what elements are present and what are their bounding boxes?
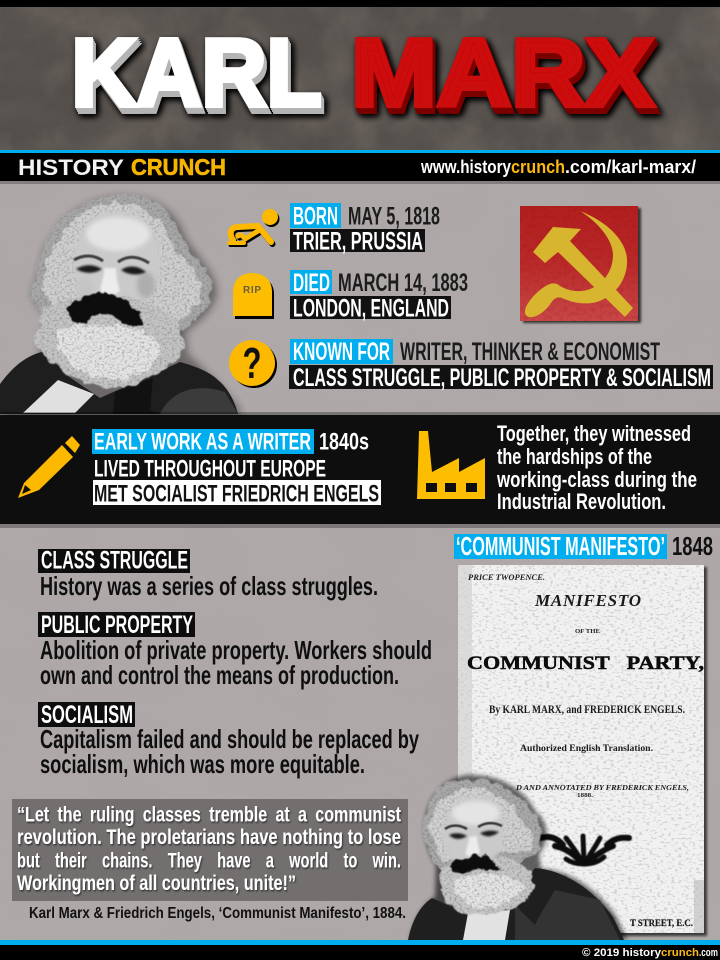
factory text: Industrial Revolution. <box>497 489 666 514</box>
manifesto title page: PRICE TWOPENCE. <box>468 573 545 582</box>
icon: question mark <box>229 339 277 388</box>
born row: MAY 5, 1818 <box>348 202 440 230</box>
header banner with stone texture <box>0 0 720 151</box>
brand bar: CRUNCH <box>131 154 226 180</box>
socialism block: SOCIALISM <box>41 701 133 729</box>
socialism block <box>38 701 419 779</box>
footer bar <box>0 940 720 960</box>
quote box: Workingmen of all countries, unite!” <box>17 872 296 895</box>
brand bar: .com/karl-marx/ <box>565 157 696 177</box>
factory text: the hardships of the <box>497 444 652 469</box>
factory text <box>496 421 697 514</box>
born row: TRIER, PRUSSIA <box>293 228 423 256</box>
icon: RIP tombstone <box>233 273 274 319</box>
class struggle block <box>38 546 378 601</box>
brand bar: www.history <box>420 157 511 177</box>
footer bar: © 2019 history <box>582 947 662 959</box>
footer bar: crunch <box>661 947 699 959</box>
manifesto title page: D AND ANNOTATED BY FREDERICK ENGELS, <box>515 783 689 792</box>
icon: crawling baby <box>229 209 280 245</box>
brand bar: crunch <box>511 157 565 177</box>
black band <box>0 412 720 528</box>
icon: factory <box>417 431 485 499</box>
early work block: MET SOCIALIST FRIEDRICH ENGELS <box>94 480 379 508</box>
known for row <box>289 338 713 392</box>
brand bar: HISTORY <box>18 155 124 180</box>
born row <box>290 202 440 256</box>
public property block: Abolition of private property. Workers should <box>40 635 432 665</box>
small portrait: Karl Marx <box>408 775 627 940</box>
class struggle block: CLASS STRUGGLE <box>41 546 188 574</box>
manifesto title page: OF THE <box>575 629 600 635</box>
early work block <box>92 428 381 508</box>
died row: LONDON, ENGLAND <box>293 294 449 322</box>
class struggle block: History was a series of class struggles. <box>40 571 378 601</box>
quote box: “Let the ruling classes tremble at a communist <box>17 804 401 826</box>
early work block: LIVED THROUGHOUT EUROPE <box>94 456 326 482</box>
manifesto title page: MANIFESTO <box>534 591 641 610</box>
quote box: but their chains. They have a world to win. <box>17 850 401 872</box>
icon: hammer and sickle flag <box>520 206 641 323</box>
quote box: revolution. The proletarians have nothing to lose <box>17 826 401 849</box>
socialism block: socialism, which was more equitable. <box>40 749 365 779</box>
manifesto title page: Authorized English Translation. <box>520 743 653 753</box>
died row: DIED <box>293 269 330 297</box>
known for row: KNOWN FOR <box>293 338 390 366</box>
brand bar <box>0 150 720 184</box>
public property block: own and control the means of production. <box>40 660 399 690</box>
icon: question mark: ? <box>242 339 262 388</box>
early work block: 1840s <box>319 428 369 456</box>
early work block: EARLY WORK AS A WRITER <box>94 428 311 456</box>
died row: MARCH 14, 1883 <box>338 269 468 297</box>
manifesto title page: COMMUNIST PARTY, <box>467 653 704 674</box>
title: KARL <box>72 20 322 126</box>
portrait: Karl Marx <box>0 195 241 416</box>
public property block: PUBLIC PROPERTY <box>41 611 193 639</box>
manifesto title page: T STREET, E.C. <box>630 918 693 928</box>
manifesto title page: By KARL MARX, and FREDERICK ENGELS. <box>489 704 685 716</box>
title <box>72 20 654 126</box>
socialism block: Capitalism failed and should be replaced by <box>40 724 419 754</box>
quote box <box>12 799 408 901</box>
manifesto title page: 1888. <box>577 793 594 799</box>
icon: RIP tombstone: RIP <box>243 285 261 296</box>
title: MARX <box>351 20 654 126</box>
public property block <box>38 611 432 690</box>
died row <box>290 269 468 322</box>
icon: pencil <box>18 436 80 498</box>
manifesto title page <box>458 565 707 936</box>
born row: BORN <box>293 202 338 230</box>
quote attribution: Karl Marx & Friedrich Engels, ‘Communist Manifesto’, 1884. <box>29 905 406 922</box>
